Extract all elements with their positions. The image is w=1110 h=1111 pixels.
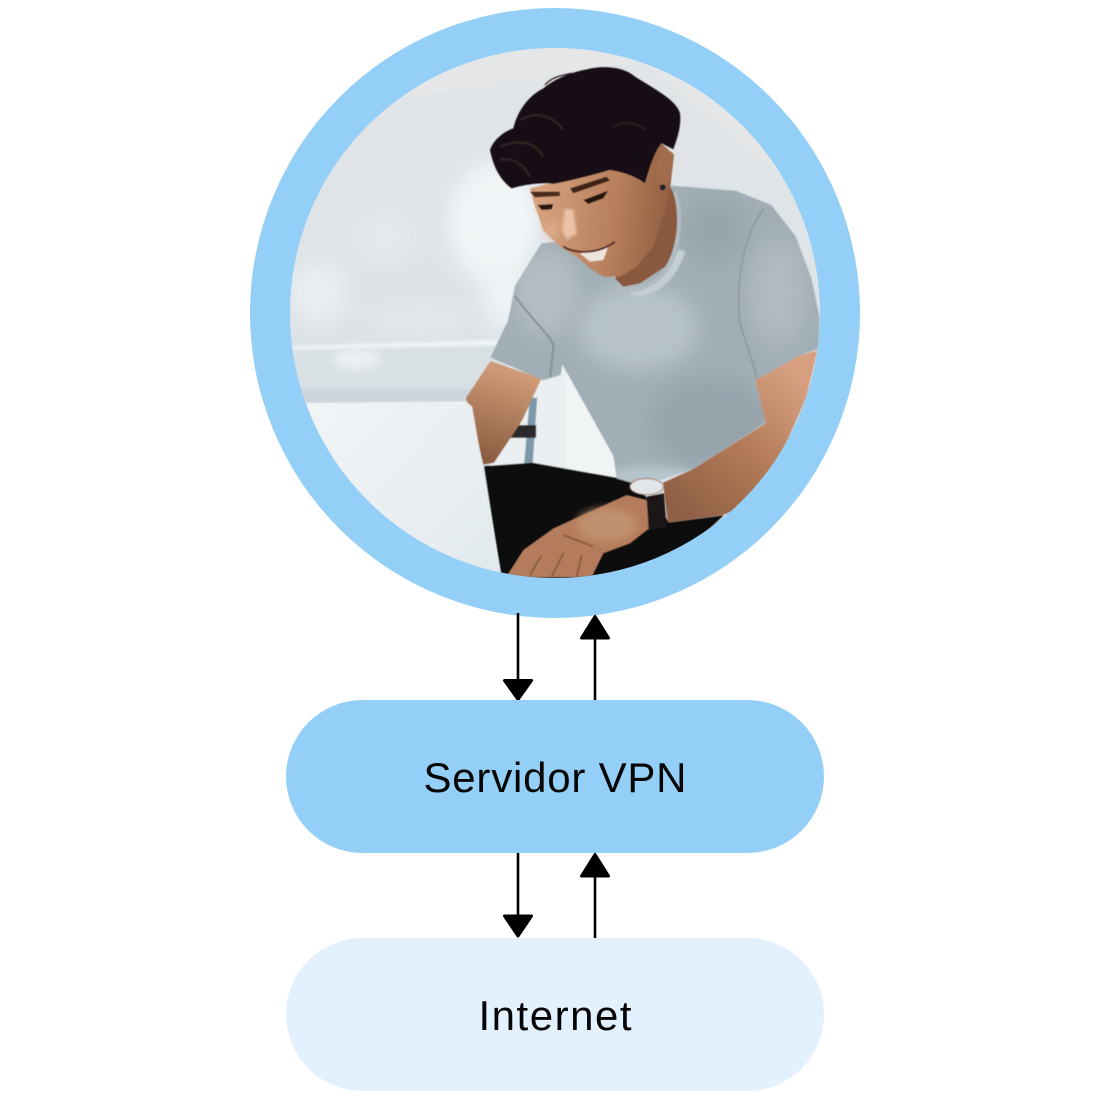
laptop screen back [306, 401, 502, 572]
hair strands [500, 73, 647, 177]
watch face [630, 479, 663, 495]
arrow: Internet up to VPN server [582, 854, 608, 938]
arrow: frame down to VPN server [504, 613, 532, 700]
face [530, 143, 674, 277]
hair [490, 67, 680, 188]
photo: person working on a laptop [290, 48, 820, 578]
photo frame: light blue ring [250, 8, 860, 618]
facial features [530, 145, 673, 262]
arm: right with wrist [663, 350, 817, 522]
node: Internet [286, 938, 824, 1091]
hand highlights and fingers [530, 508, 637, 577]
trousers [484, 463, 724, 580]
node: Internet: Internet [478, 992, 632, 1039]
t-shirt shading [515, 198, 806, 483]
t-shirt [490, 186, 820, 483]
arrow: VPN server up to frame [582, 616, 608, 700]
node: Servidor VPN [286, 700, 824, 853]
background: blurred wall and shelf [290, 48, 782, 478]
watch strap [647, 493, 667, 531]
node: Servidor VPN: Servidor VPN [424, 754, 686, 801]
arrow: VPN server down to Internet [504, 853, 532, 936]
arm: left [466, 361, 541, 464]
chair frame [508, 398, 537, 464]
head [490, 67, 680, 290]
collar [617, 192, 679, 290]
neck [615, 183, 680, 287]
hand, watch and trouser details [508, 479, 667, 577]
hand [508, 495, 649, 577]
